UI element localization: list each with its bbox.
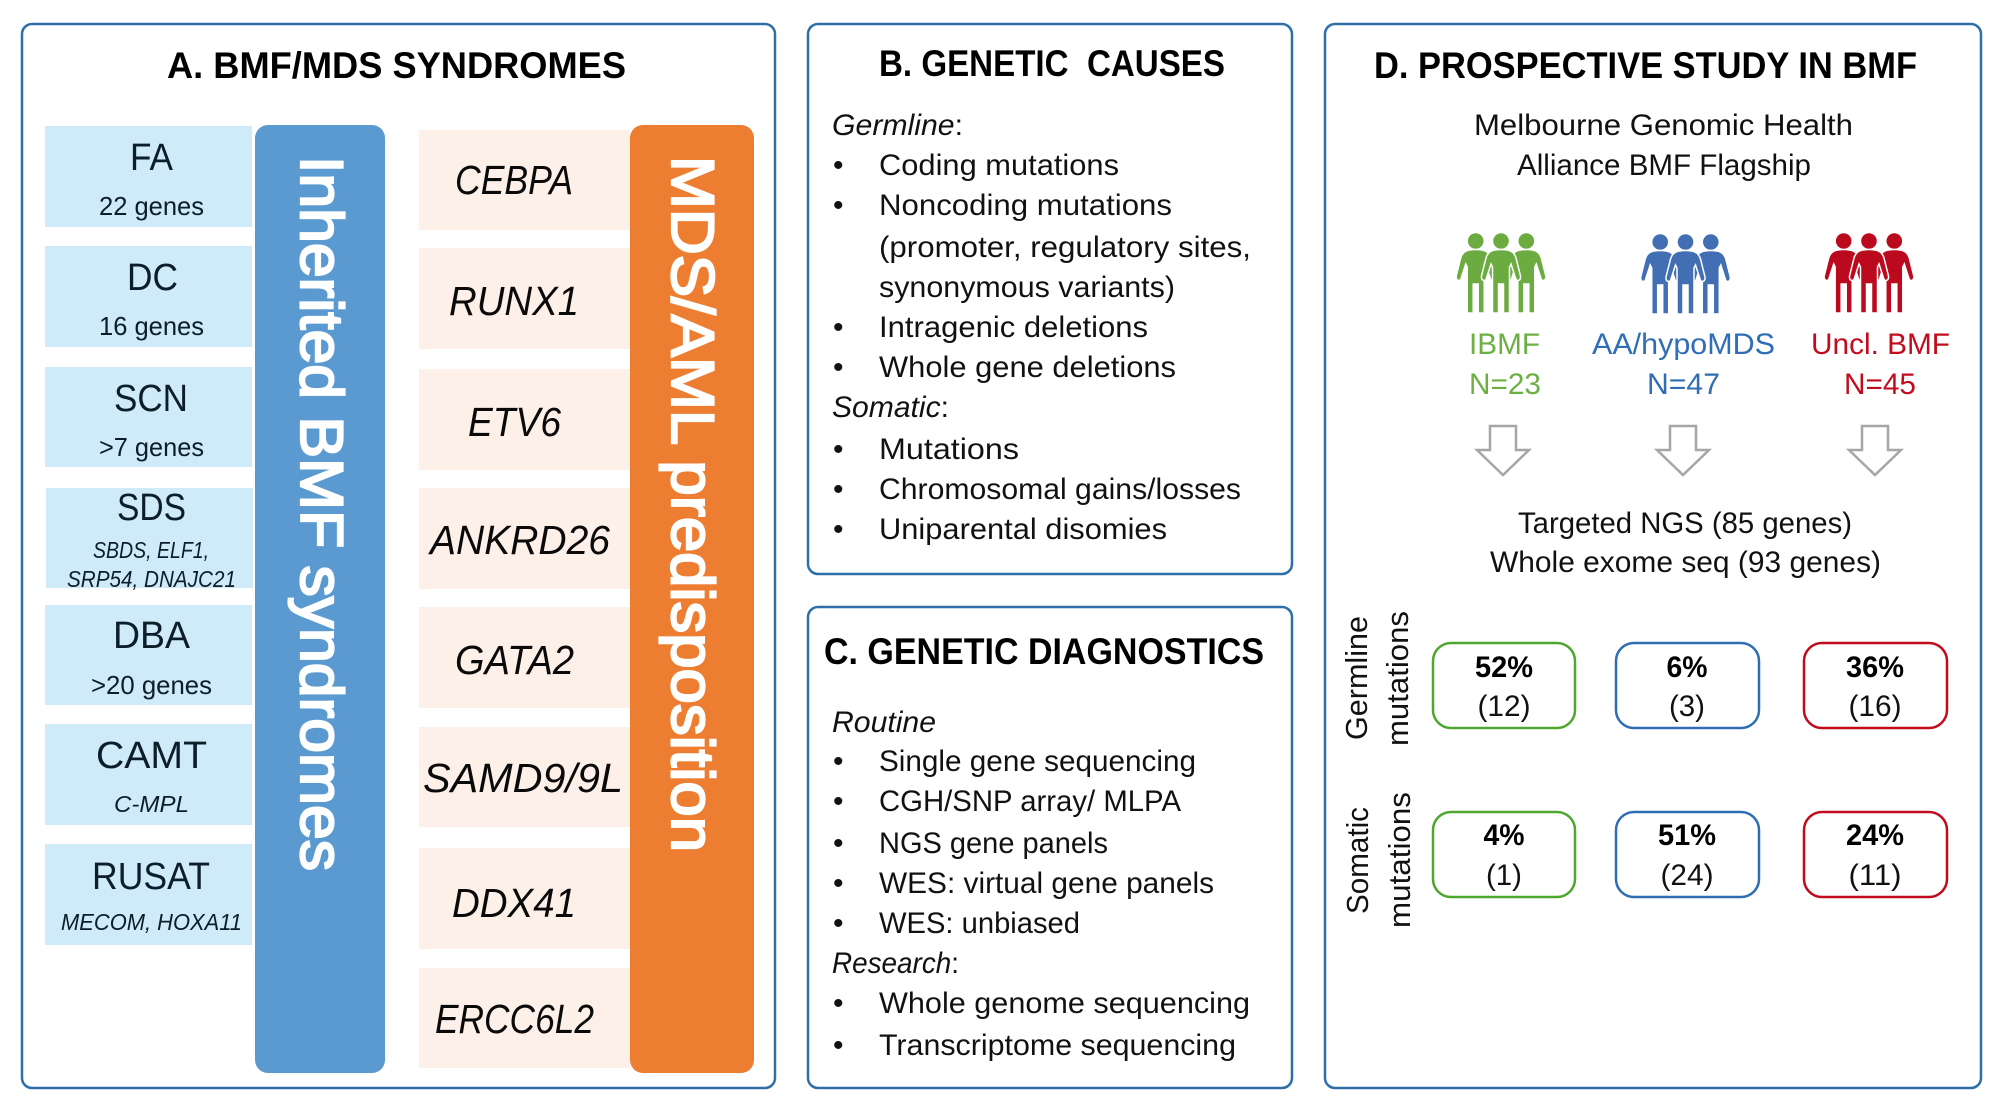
- research list: Transcriptome sequencing: [879, 1029, 1236, 1062]
- arrow red column: [1849, 426, 1901, 475]
- syndrome box RUSAT: MECOM, HOXA11: [61, 909, 242, 935]
- somatic list: Uniparental disomies: [879, 513, 1167, 546]
- syndrome box RUSAT: RUSAT: [92, 856, 210, 898]
- sequencing methods text: Whole exome seq (93 genes): [1490, 546, 1881, 579]
- result box somatic IBMF: (1): [1486, 859, 1522, 892]
- routine list: [832, 706, 1214, 940]
- subtitle: [1474, 109, 1853, 182]
- syndrome box DC: DC: [127, 257, 178, 299]
- group label Uncl. BMF: [1811, 328, 1950, 401]
- germline list: •: [833, 351, 844, 384]
- result box germline Uncl: 36%: [1846, 651, 1904, 684]
- syndrome box CAMT: C-MPL: [114, 791, 189, 817]
- routine list: Routine: [832, 706, 936, 739]
- gene box GATA2: [419, 607, 630, 708]
- gene box ERCC6L2: [419, 968, 630, 1068]
- gene box SAMD9/9L: [419, 727, 630, 827]
- gene box ANKRD26: ANKRD26: [427, 517, 610, 563]
- gene box ETV6: [419, 369, 630, 470]
- somatic list: Chromosomal gains/losses: [879, 473, 1241, 506]
- germline list: synonymous variants): [879, 271, 1175, 304]
- group label IBMF: [1469, 328, 1541, 401]
- syndrome box SCN: >7 genes: [99, 432, 204, 462]
- syndrome box SCN: [45, 367, 252, 467]
- gene box ETV6: ETV6: [468, 399, 561, 445]
- syndrome box FA: 22 genes: [99, 191, 204, 221]
- sequencing methods text: Targeted NGS (85 genes): [1518, 507, 1852, 540]
- syndrome box DBA: DBA: [113, 615, 191, 657]
- row label somatic mutations: mutations: [1382, 792, 1417, 928]
- panel C: genetic diagnostics: [808, 607, 1292, 1088]
- germline list: (promoter, regulatory sites,: [879, 231, 1251, 264]
- routine list: •: [833, 745, 844, 778]
- group label AA/hypoMDS: AA/hypoMDS: [1592, 328, 1775, 361]
- result box germline AA: [1616, 643, 1759, 728]
- result box germline IBMF: 52%: [1475, 651, 1533, 684]
- gene box RUNX1: RUNX1: [449, 278, 579, 324]
- subtitle: Alliance BMF Flagship: [1517, 149, 1811, 182]
- somatic list: •: [833, 433, 844, 466]
- germline list: Intragenic deletions: [879, 311, 1148, 344]
- result box somatic Uncl: (11): [1848, 859, 1902, 892]
- routine list: WES: unbiased: [879, 907, 1080, 940]
- gene box SAMD9/9L: SAMD9/9L: [423, 755, 623, 801]
- subtitle: Melbourne Genomic Health: [1474, 109, 1853, 142]
- result box somatic AA: [1616, 812, 1759, 897]
- gene box DDX41: [419, 848, 630, 949]
- gene box ERCC6L2: ERCC6L2: [435, 996, 594, 1042]
- gene box CEBPA: [419, 130, 630, 230]
- gene box DDX41: DDX41: [452, 880, 576, 926]
- germline list: •: [833, 189, 844, 222]
- row label somatic mutations: [1340, 792, 1417, 928]
- heading B: B. GENETIC CAUSES: [879, 43, 1225, 84]
- result box germline AA: (3): [1669, 690, 1705, 723]
- group label AA/hypoMDS: [1592, 328, 1775, 401]
- result box somatic IBMF: 4%: [1484, 819, 1524, 852]
- research list: •: [833, 1029, 844, 1062]
- panel B: genetic causes: [808, 24, 1292, 574]
- routine list: •: [833, 907, 844, 940]
- syndrome box SDS: [46, 487, 253, 592]
- group label Uncl. BMF: N=45: [1844, 368, 1916, 401]
- gene box GATA2: GATA2: [455, 637, 574, 683]
- germline list: •: [833, 149, 844, 182]
- result box somatic IBMF: [1433, 812, 1575, 897]
- syndrome box CAMT: CAMT: [96, 735, 207, 777]
- syndrome box CAMT: [45, 724, 252, 825]
- vertical bar: MDS/AML predisposition: [630, 125, 754, 1073]
- row label germline mutations: [1339, 611, 1415, 746]
- result box somatic AA: 51%: [1658, 819, 1716, 852]
- routine list: NGS gene panels: [879, 827, 1108, 860]
- germline list: Germline:: [832, 109, 963, 142]
- gene box RUNX1: [419, 248, 630, 349]
- research list: [832, 947, 1250, 1062]
- arrow blue column: [1657, 426, 1709, 475]
- syndrome box FA: [45, 126, 252, 227]
- somatic list: •: [833, 473, 844, 506]
- result box somatic AA: (24): [1660, 859, 1714, 892]
- somatic list: [832, 391, 1241, 546]
- arrow green column: [1477, 426, 1529, 475]
- vertical bar: MDS/AML predisposition: MDS/AML predisposition: [659, 156, 726, 852]
- routine list: Single gene sequencing: [879, 745, 1196, 778]
- syndrome box SCN: SCN: [114, 378, 188, 420]
- syndrome box DBA: >20 genes: [91, 670, 212, 700]
- heading C: C. GENETIC DIAGNOSTICS: [824, 631, 1264, 672]
- syndrome box SDS: SBDS, ELF1,: [93, 537, 209, 563]
- icon: people green: [1456, 233, 1546, 313]
- routine list: •: [833, 867, 844, 900]
- syndrome box SDS: SDS: [117, 487, 186, 529]
- somatic list: •: [833, 513, 844, 546]
- row label germline mutations: Germline: [1339, 616, 1374, 740]
- group label IBMF: N=23: [1469, 368, 1541, 401]
- research list: Research:: [832, 947, 959, 980]
- heading A: A. BMF/MDS SYNDROMES: [167, 45, 626, 86]
- routine list: WES: virtual gene panels: [879, 867, 1214, 900]
- gene box ANKRD26: [419, 488, 630, 589]
- group label Uncl. BMF: Uncl. BMF: [1811, 328, 1950, 361]
- syndrome box RUSAT: [45, 844, 252, 945]
- syndrome box SDS: SRP54, DNAJC21: [67, 566, 236, 592]
- icon: people blue: [1641, 234, 1730, 314]
- germline list: Coding mutations: [879, 149, 1119, 182]
- research list: Whole genome sequencing: [879, 987, 1250, 1020]
- vertical bar: Inherited BMF syndromes: Inherited BMF syndromes: [288, 156, 355, 871]
- syndrome box DBA: [45, 605, 252, 705]
- result box germline IBMF: (12): [1478, 690, 1530, 723]
- routine list: •: [833, 827, 844, 860]
- row label germline mutations: mutations: [1380, 611, 1415, 746]
- result box germline Uncl: (16): [1848, 690, 1902, 723]
- group label AA/hypoMDS: N=47: [1647, 368, 1720, 401]
- syndrome box DC: 16 genes: [99, 311, 204, 341]
- germline list: Noncoding mutations: [879, 189, 1172, 222]
- row label somatic mutations: Somatic: [1340, 807, 1375, 914]
- panel D: prospective study: [1325, 24, 1981, 1088]
- routine list: •: [833, 785, 844, 818]
- germline list: •: [833, 311, 844, 344]
- group label IBMF: IBMF: [1469, 328, 1540, 361]
- heading D: D. PROSPECTIVE STUDY IN BMF: [1374, 45, 1917, 86]
- result box germline IBMF: [1433, 643, 1575, 728]
- result box somatic Uncl: [1804, 812, 1947, 897]
- germline list: Whole gene deletions: [879, 351, 1176, 384]
- result box germline AA: 6%: [1666, 651, 1708, 684]
- research list: •: [833, 987, 844, 1020]
- syndrome box FA: FA: [130, 137, 174, 179]
- syndrome box DC: [45, 246, 252, 347]
- icon: people red: [1824, 233, 1914, 313]
- germline list: [832, 109, 1251, 384]
- panel A: BMF/MDS syndromes: [22, 24, 775, 1088]
- result box germline Uncl: [1804, 643, 1947, 728]
- routine list: CGH/SNP array/ MLPA: [879, 785, 1181, 818]
- vertical bar: Inherited BMF syndromes: [255, 125, 385, 1073]
- somatic list: Mutations: [879, 433, 1019, 466]
- sequencing methods text: [1490, 507, 1881, 579]
- gene box CEBPA: CEBPA: [455, 157, 573, 203]
- somatic list: Somatic:: [832, 391, 949, 424]
- result box somatic Uncl: 24%: [1846, 819, 1904, 852]
